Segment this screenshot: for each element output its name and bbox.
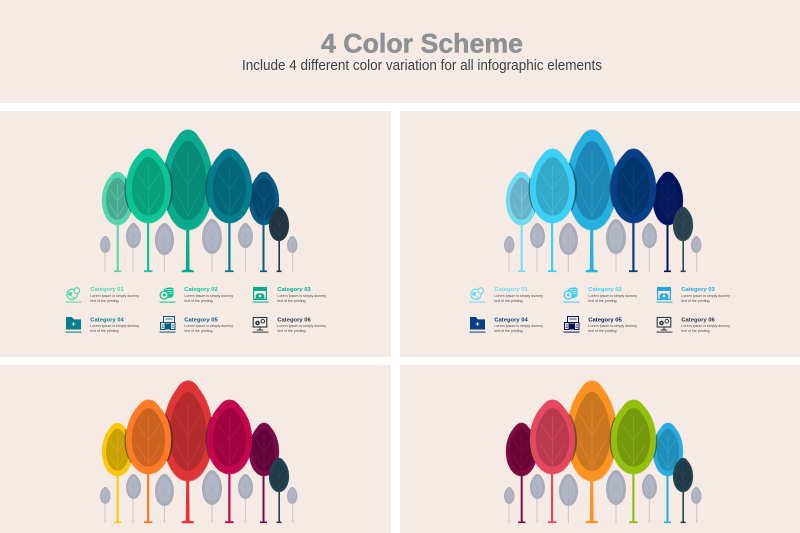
legend: category 06: Lorem Ipsum is simply dummy [681,323,730,328]
tree: dark blue [611,149,656,272]
subtitle: Include 4 different color variation for all infographic elements [242,58,602,74]
legend: category 03: text of the printing. [277,298,306,303]
tree: plum [249,423,279,523]
legend: category 02: text of the printing. [588,298,617,303]
title: 4 Color Scheme [321,28,523,58]
legend: category 01 [470,287,543,303]
trees: blue [504,130,702,272]
legend: category 04 [470,317,543,333]
legend: category 05: Category 05 [588,318,623,324]
legend: category 05: Category 05 [184,318,219,324]
legend: category 06: Lorem Ipsum is simply dummy [277,323,326,328]
legend: category 05: Lorem Ipsum is simply dummy [184,323,233,328]
tree: orange [126,400,171,523]
tree shadows [528,400,658,474]
legend: category 03: Category 03 [681,287,716,293]
legend: category 05: text of the printing. [184,328,213,333]
tree: teal [207,149,252,272]
tree: maroon [506,423,537,523]
trees: warm [100,381,298,523]
tree: lime [611,400,656,523]
tree shadows [124,149,254,223]
legend: category 04: Lorem Ipsum is simply dummy [90,323,139,328]
legend: category 05: Lorem Ipsum is simply dummy [588,323,637,328]
legend: category 06: Category 06 [681,318,716,324]
legend: category 01: text of the printing. [90,298,119,303]
panel: warm color scheme [0,365,391,533]
panel: mixed color scheme [400,365,800,533]
legend: category 01 [66,287,139,303]
tree: blue [653,423,683,523]
legend: category 02: text of the printing. [184,298,213,303]
legend: category 03: Lorem Ipsum is simply dummy [277,293,326,298]
legend: category 01: text of the printing. [494,298,523,303]
legend: category 02: Category 02 [588,287,622,293]
panel: green color scheme [0,111,391,357]
legend: category 04: text of the printing. [90,328,119,333]
legend: category 05 [564,316,637,333]
legend: category 06: text of the printing. [681,328,710,333]
legend: category 05 [160,316,233,333]
tree: green [126,149,171,272]
tree: dark small [673,207,693,272]
tree: crimson [207,400,252,523]
tree: yellow [102,423,133,523]
small grey trees [504,219,702,272]
legend: category 06: text of the printing. [277,328,306,333]
tree shadows [124,400,254,474]
tree: large center [163,130,213,272]
tree: light mint [102,172,133,272]
tree: deep blue [249,172,279,272]
tree shadows [528,149,658,223]
legend: category 02: Category 02 [184,287,218,293]
legend: category 01: Lorem Ipsum is simply dummy [90,293,139,298]
tree: pale blue [506,172,537,272]
legend: category 04: text of the printing. [494,328,523,333]
legend: category 04: Category 04 [494,318,529,324]
tree: large red [163,381,213,523]
tree: sky blue [530,149,575,272]
tree: navy [653,172,683,272]
legend: category 04: Lorem Ipsum is simply dummy [494,323,543,328]
legend: category 03 [252,287,326,303]
legend: category 04 [66,317,139,333]
legend: category 02 [564,287,637,303]
small grey trees [100,219,298,272]
legend: category 03: Lorem Ipsum is simply dummy [681,293,730,298]
tree: large orange [567,381,617,523]
legend: category 04: Category 04 [90,318,125,324]
legend: category 02: Lorem Ipsum is simply dummy [184,293,233,298]
legend: category 05: text of the printing. [588,328,617,333]
legend: category 01: Category 01 [90,287,125,293]
header panel [0,0,800,103]
legend: category 06 [656,318,730,333]
panel: blue color scheme [400,111,800,357]
tree: dark small [269,207,289,272]
tree: large center [567,130,617,272]
legend: category 02 [160,287,233,303]
legend: category 06 [252,318,326,333]
trees: mixed [504,381,702,523]
tree: dark small [269,458,289,523]
legend: category 03 [656,287,730,303]
tree: coral [530,400,575,523]
legend: category 01: Category 01 [494,287,529,293]
legend: category 02: Lorem Ipsum is simply dummy [588,293,637,298]
legend: category 03: Category 03 [277,287,312,293]
small grey trees [100,470,298,523]
legend: category 01: Lorem Ipsum is simply dummy [494,293,543,298]
legend: category 03: text of the printing. [681,298,710,303]
small grey trees [504,470,702,523]
legend: category 06: Category 06 [277,318,312,324]
tree: dark small [673,458,693,523]
